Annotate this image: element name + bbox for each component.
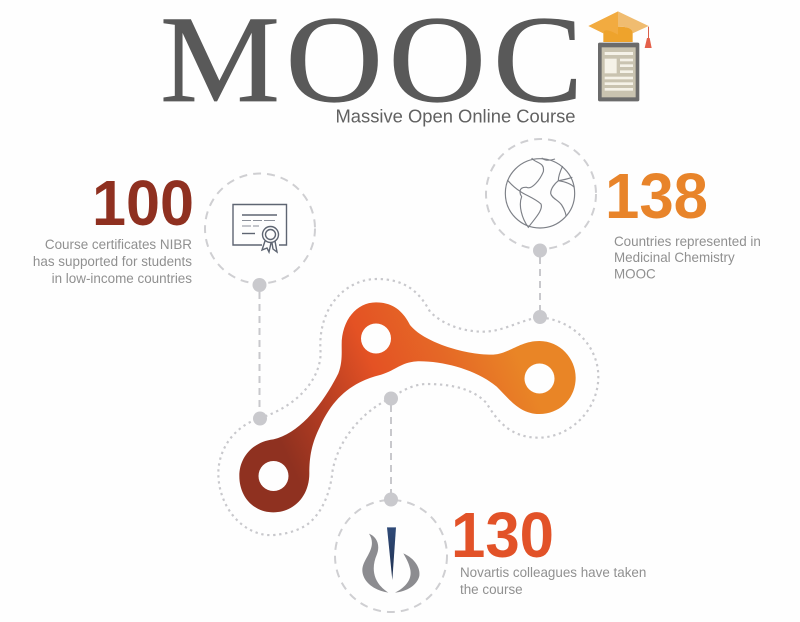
orange connected blob [239, 302, 576, 512]
description: Medicinal Chemistry [614, 250, 735, 265]
dashed connector lines [260, 257, 540, 493]
icon: globe [505, 158, 575, 228]
description: Novartis colleagues have taken [460, 565, 646, 580]
dashed circle [205, 174, 315, 284]
description: the course [460, 582, 523, 597]
icon: novartis flame [362, 527, 420, 593]
panel: certificates [33, 167, 315, 286]
description: Course certificates NIBR [45, 237, 192, 252]
description [460, 565, 646, 597]
icon: certificate [233, 204, 286, 252]
connector dots [252, 244, 547, 506]
description: has supported for students [33, 254, 192, 269]
number: 138 [605, 160, 708, 232]
dashed circle [486, 139, 596, 249]
subtitle: Massive Open Online Course [336, 106, 576, 126]
description: in low-income countries [52, 271, 192, 286]
panel: countries [486, 139, 761, 282]
description: MOOC [614, 266, 656, 282]
description [33, 237, 192, 286]
number: 130 [451, 499, 554, 571]
icon: graduation cap on tablet [588, 11, 652, 101]
dashed circle [335, 500, 447, 612]
dotted outline around blob [218, 279, 598, 535]
description: Countries represented in [614, 234, 761, 249]
description [614, 234, 761, 282]
panel: colleagues [335, 499, 646, 612]
number: 100 [92, 167, 194, 239]
